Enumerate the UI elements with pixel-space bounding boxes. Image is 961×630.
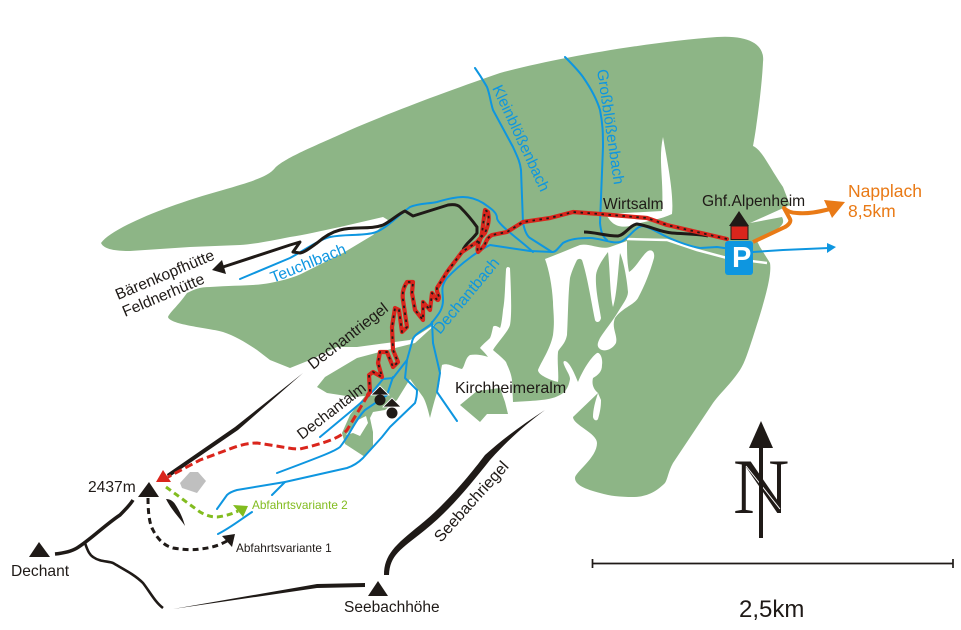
label: Bärenkopfhütte: Bärenkopfhütte [113,247,217,304]
icon: peak 2437m [138,482,159,497]
label: Kirchheimeralm: Kirchheimeralm [455,380,566,397]
label: Kleinblößenbach: Kleinblößenbach [488,83,553,194]
road: Bärenkopfhütte black line with arrow [212,205,477,274]
label: Dechantriegel: Dechantriegel [305,300,392,373]
label: Seebachhöhe: Seebachhöhe [344,599,440,616]
route: red and black dashed ascent [368,210,727,395]
scale bar [592,559,953,623]
icon: parking sign [725,241,753,275]
white clearing: notch near Dechantalm and finger [346,393,601,436]
label: Abfahrtsvariante 2: Abfahrtsvariante 2 [252,498,348,512]
forest patch at Kirchheimeralm [460,388,508,422]
route: Abfahrtsvariante 1 black dashed arrow [148,498,235,550]
label: Teuchlbach: Teuchlbach [268,241,349,287]
ridge: line to Seebachhöhe [173,583,365,609]
icon: north arrow: N [733,443,789,530]
arrow: river direction [827,243,836,253]
icon: peak Dechant [29,542,50,557]
icon: parking sign: P [732,242,751,274]
stream: short branches [218,482,285,534]
ridge: Dechant to 2437m [55,500,133,554]
stream: Teuchlbach [240,197,533,279]
label: Wirtsalm: Wirtsalm [603,196,664,213]
route: orange road to Napplach with arrow [753,200,845,242]
icon: peak Seebachhöhe [368,581,388,596]
icon: Dechantalm hut 1 [371,386,389,406]
panel: forest area [101,37,790,497]
stream: side branch lower [277,377,393,473]
label: Feldnerhütte: Feldnerhütte [120,271,207,321]
route: Abfahrtsvariante 2 green dashed arrow [166,487,248,517]
road: Wirtsalm black line [584,224,708,236]
icon: grey rock area [180,472,206,493]
stream: side branch Dechantalm [320,360,407,437]
label: Dechant: Dechant [11,563,70,580]
label: Dechantbach: Dechantbach [430,255,503,338]
icon: Ghf. Alpenheim house [729,211,749,240]
stream: Großblößenbach [565,57,607,240]
label: Seebachriegel: Seebachriegel [431,458,512,546]
label: Großblößenbach: Großblößenbach [593,68,627,186]
ridge lines [55,500,163,608]
label: 8,5km: 8,5km [848,201,896,221]
ridge: Seebachriegel [384,410,545,575]
ridge: south branch [85,543,163,608]
icon: Dechantalm hut 2 [383,398,401,418]
stream: main river with arrow [217,226,829,509]
stream: Kirchheimeralm branch [432,322,457,421]
label: Napplach: Napplach [848,181,922,201]
ridge: Dechantriegel line [167,373,303,478]
label: Dechantalm: Dechantalm [294,380,370,443]
route: red dashed descent with arrow [156,395,368,482]
white clearing: central avalanche cuts [538,241,654,382]
scale bar: 2,5km [739,596,804,623]
ridge: small blade near summit [166,499,185,526]
label: Abfahrtsvariante 1: Abfahrtsvariante 1 [236,541,332,555]
label: 2437m: 2437m [88,479,136,496]
stream: Kleinblößenbach [475,68,552,252]
streams [217,57,836,534]
white clearing: upper slit at Wirtsalm [606,137,672,227]
label: Ghf.Alpenheim: Ghf.Alpenheim [702,193,805,210]
white clearing: thin strip by river [627,239,767,263]
